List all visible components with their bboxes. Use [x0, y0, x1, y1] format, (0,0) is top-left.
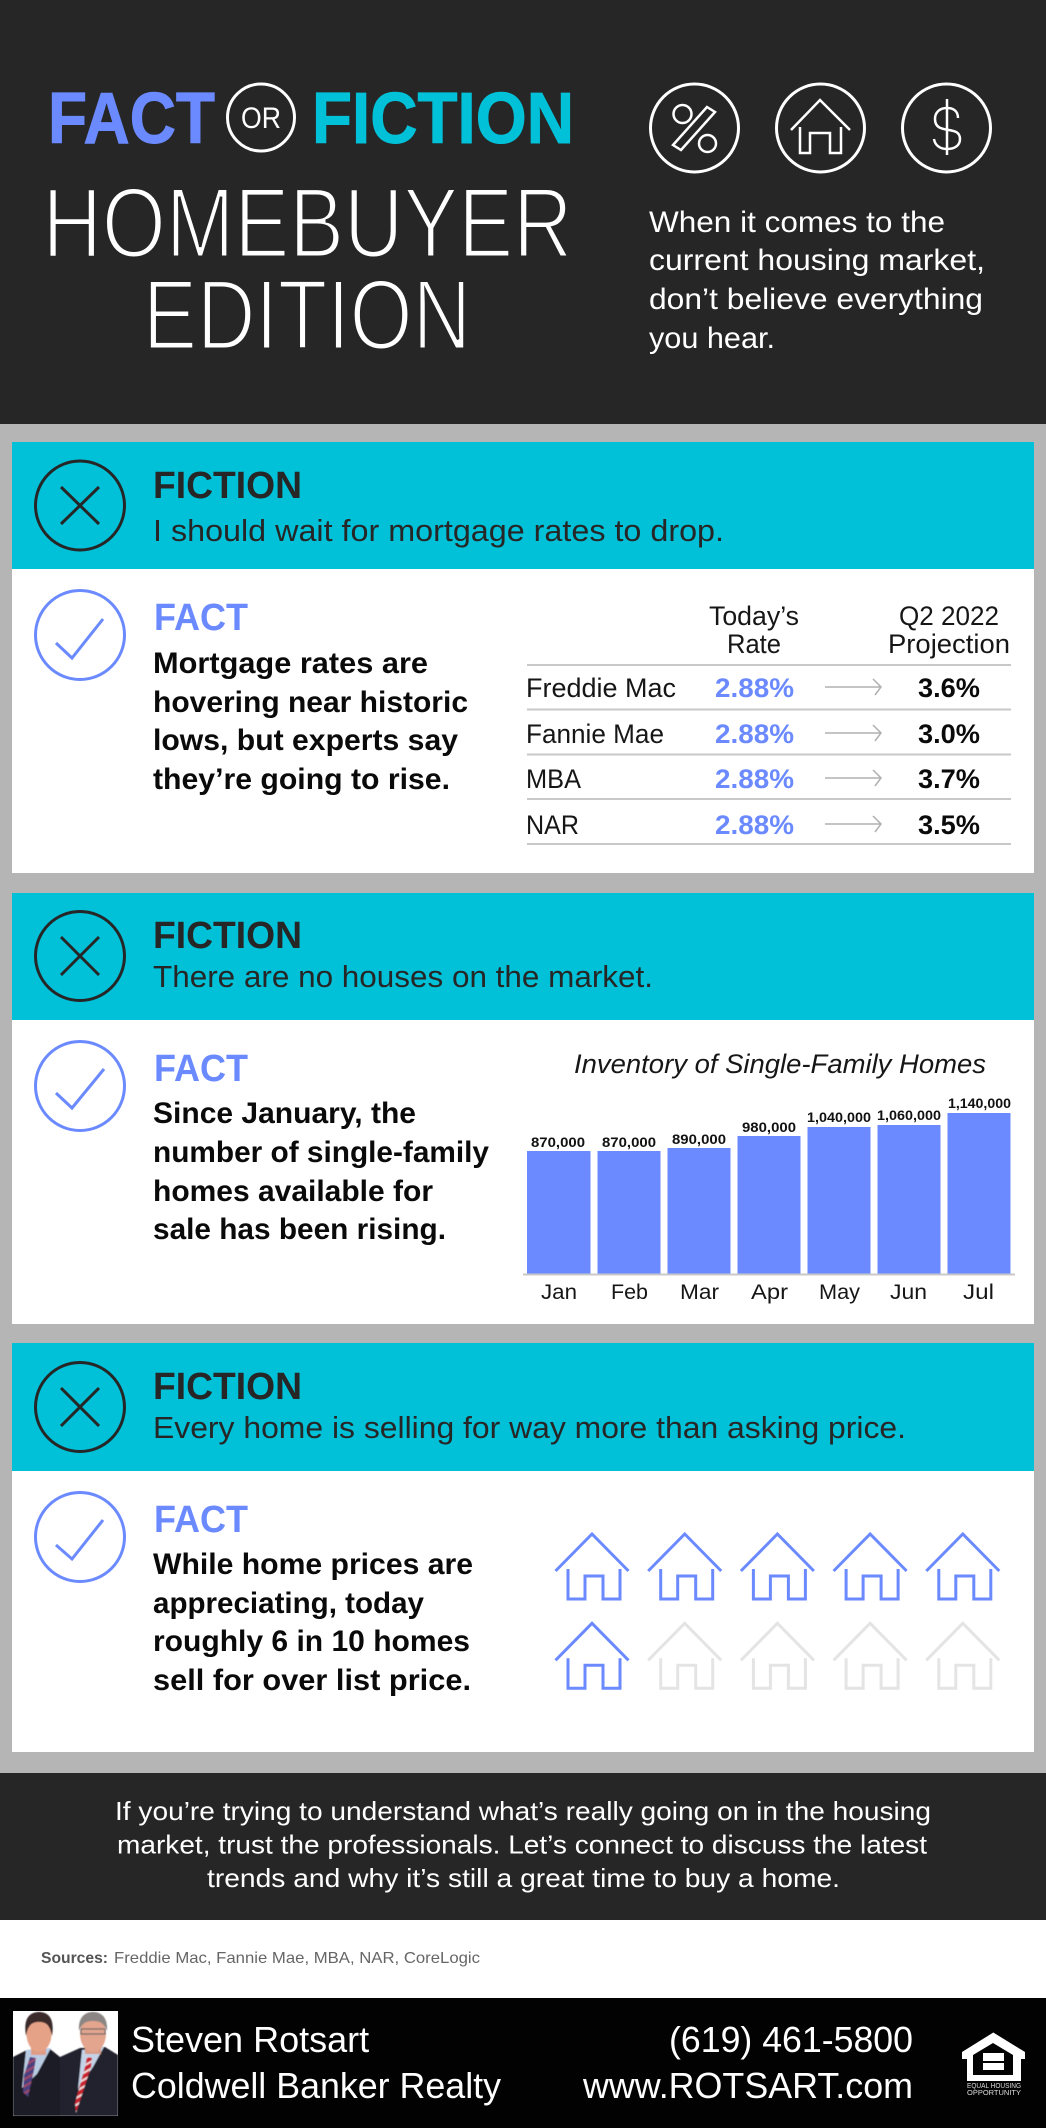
fiction banner 3: FICTION	[153, 1366, 302, 1408]
pictogram: 6 in 10 homes	[556, 1534, 999, 1688]
fiction banner 1	[12, 442, 1034, 569]
bar chart: inventory: Feb	[611, 1281, 648, 1304]
rates table: 3.0%	[918, 719, 980, 749]
icon: equal housing opportunity: EQUAL HOUSING	[967, 2081, 1021, 2090]
intro text: current housing market,	[649, 244, 985, 277]
sources strip: Freddie Mac, Fannie Mae, MBA, NAR, CoreLogic	[114, 1950, 480, 1967]
agent footer	[0, 1998, 1046, 2128]
fact text	[153, 647, 468, 796]
fact text	[153, 1097, 489, 1246]
icon: equal housing opportunity	[962, 2032, 1025, 2097]
sources strip: Sources:	[41, 1950, 108, 1967]
house 5	[926, 1534, 999, 1599]
sources strip	[0, 1920, 1046, 1998]
rates table: Today’s	[709, 601, 799, 631]
bar chart: inventory: Jan	[541, 1281, 577, 1304]
bar chart: inventory: 890,000	[672, 1131, 726, 1147]
rates table	[526, 601, 1011, 844]
intro text: When it comes to the	[649, 206, 945, 239]
fiction banner 2: There are no houses on the market.	[153, 959, 653, 994]
agent photo	[13, 2011, 118, 2116]
fiction banner 2: FICTION	[153, 915, 302, 957]
icon: x circle	[36, 461, 124, 550]
fiction banner 1: FICTION	[153, 465, 302, 507]
rates table: 2.88%	[715, 673, 794, 703]
bar chart: inventory: May	[819, 1281, 861, 1304]
bar chart: inventory: 1,060,000	[877, 1107, 941, 1123]
fact text: roughly 6 in 10 homes	[153, 1625, 470, 1658]
panel: mortgage rates	[12, 442, 1034, 873]
rates table: NAR	[526, 810, 579, 840]
title: fact or fiction: OR	[241, 102, 281, 135]
house 1	[556, 1534, 628, 1599]
fact heading: FACT	[154, 1048, 248, 1090]
bar chart: inventory: 980,000	[742, 1119, 796, 1135]
icon: check circle	[36, 1492, 124, 1582]
agent name: Coldwell Banker Realty	[131, 2065, 501, 2106]
bar chart: inventory: Apr	[751, 1281, 788, 1304]
icon: percent	[650, 84, 738, 172]
panel: home prices	[12, 1343, 1034, 1752]
bar chart: inventory: Mar	[680, 1281, 719, 1304]
fiction banner 2	[12, 893, 1034, 1020]
bar chart: inventory: Jul	[963, 1281, 994, 1304]
fact text: While home prices are	[153, 1548, 473, 1581]
title: fact or fiction: FICTION	[312, 79, 574, 159]
title: fact or fiction: FACT	[48, 79, 215, 159]
rates table: 2.88%	[715, 719, 794, 749]
intro text: don’t believe everything	[649, 283, 983, 316]
fact heading: FACT	[154, 1499, 248, 1541]
chart title: Inventory of Single-Family Homes	[574, 1049, 986, 1079]
house 2	[648, 1534, 721, 1599]
bar chart: inventory: 1,040,000	[807, 1109, 871, 1125]
agent name	[131, 2019, 501, 2106]
fact text: Since January, the	[153, 1097, 416, 1130]
icon: house	[776, 84, 864, 172]
fact text: they’re going to rise.	[153, 763, 450, 796]
fiction banner 3: Every home is selling for way more than asking price.	[153, 1410, 906, 1445]
call to action band	[0, 1773, 1046, 1920]
icon: x circle	[36, 912, 124, 1000]
house 4	[834, 1534, 907, 1599]
header panel	[0, 0, 1046, 424]
fact text: hovering near historic	[153, 686, 468, 719]
bar chart: inventory	[523, 1049, 1015, 1304]
fiction banner 3	[12, 1343, 1034, 1471]
rates table: 3.7%	[918, 764, 980, 794]
rates table: Q2 2022	[899, 601, 999, 631]
fact text: appreciating, today	[153, 1587, 424, 1620]
rates table: Fannie Mae	[526, 719, 664, 749]
fact text: number of single-family	[153, 1136, 489, 1169]
panel: inventory	[12, 893, 1034, 1324]
title: homebuyer edition: EDITION	[143, 259, 471, 370]
call to action band: market, trust the professionals. Let’s connect to discuss the latest	[117, 1830, 928, 1860]
fact text: sell for over list price.	[153, 1664, 471, 1697]
agent contact: (619) 461-5800	[669, 2019, 913, 2060]
house 10	[926, 1623, 999, 1688]
fiction banner 1: I should wait for mortgage rates to drop.	[153, 513, 724, 548]
rates table: 2.88%	[715, 764, 794, 794]
rates table: Rate	[727, 629, 781, 659]
bar chart: inventory: 1,140,000	[948, 1095, 1011, 1111]
title: fact or fiction	[48, 79, 574, 159]
icon: dollar	[902, 84, 990, 172]
intro text: you hear.	[649, 322, 775, 355]
rates table: 3.6%	[918, 673, 980, 703]
agent contact: www.ROTSART.com	[582, 2065, 913, 2106]
agent name: Steven Rotsart	[131, 2019, 369, 2060]
call to action band: If you’re trying to understand what’s really going on in the housing	[115, 1796, 931, 1826]
icon: check circle	[36, 1042, 124, 1130]
fact text: sale has been rising.	[153, 1213, 446, 1246]
house 8	[741, 1623, 814, 1688]
fact text: Mortgage rates are	[153, 647, 428, 680]
icon: x circle	[36, 1362, 124, 1452]
house 9	[834, 1623, 907, 1688]
rates table: 2.88%	[715, 810, 794, 840]
rates table: Freddie Mac	[526, 673, 676, 703]
bar chart: inventory: 870,000	[602, 1134, 656, 1150]
house 3	[741, 1534, 814, 1599]
call to action band: trends and why it’s still a great time to buy a home.	[207, 1863, 840, 1893]
bar chart: inventory: Jun	[890, 1281, 927, 1304]
rates table: MBA	[526, 764, 581, 794]
fact text	[153, 1548, 473, 1697]
intro text	[649, 206, 985, 355]
icon: equal housing opportunity: OPPORTUNITY	[967, 2088, 1021, 2097]
rates table: Projection	[888, 629, 1010, 659]
bar chart: inventory: 870,000	[531, 1134, 585, 1150]
icon: check circle	[36, 590, 124, 680]
fact text: homes available for	[153, 1175, 433, 1208]
title: homebuyer edition	[42, 167, 572, 370]
house 7	[648, 1623, 721, 1688]
fact text: lows, but experts say	[153, 724, 458, 757]
house 6	[556, 1623, 628, 1688]
rates table: 3.5%	[918, 810, 980, 840]
agent contact	[582, 2019, 913, 2106]
fact heading: FACT	[154, 597, 248, 639]
title: homebuyer edition: HOMEBUYER	[42, 167, 572, 278]
